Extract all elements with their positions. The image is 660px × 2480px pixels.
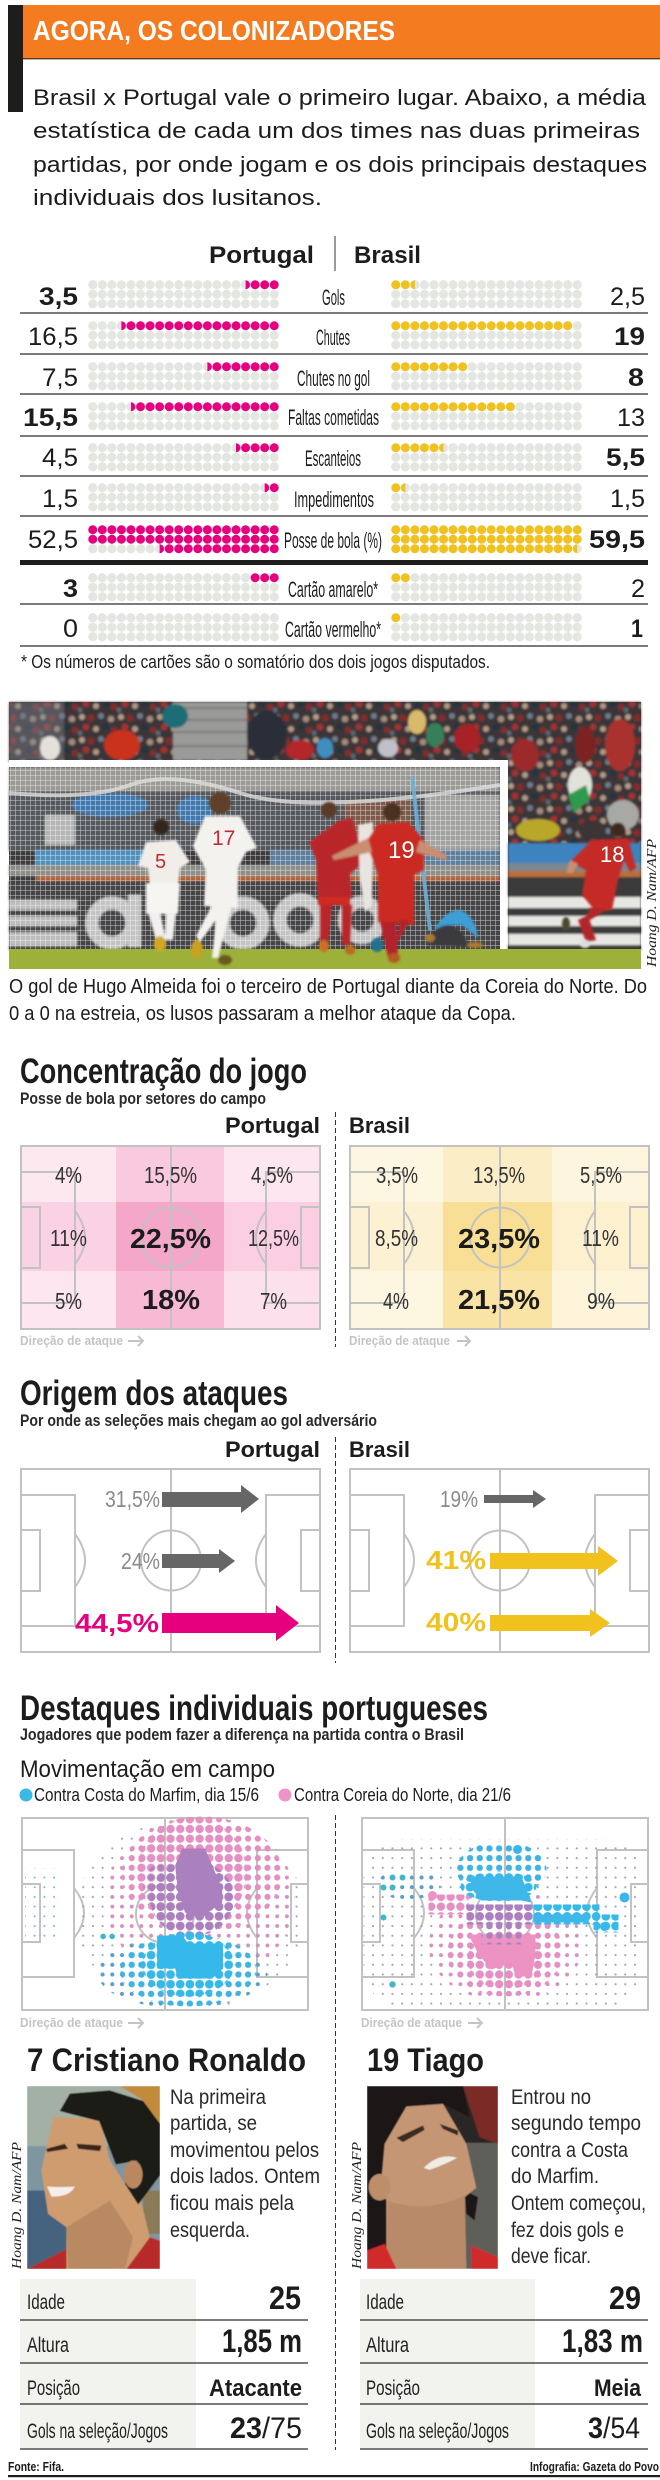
heat values: Brasil: 13,5% bbox=[473, 1162, 525, 1188]
movement map: Cristiano Ronaldo bbox=[21, 1816, 309, 2011]
heading: Origem dos ataques bbox=[20, 1374, 377, 1430]
player name: Tiago: 19 Tiago bbox=[367, 2042, 484, 2078]
arrow: 24% bbox=[121, 1548, 235, 1574]
bio text: Tiago: contra a Costa bbox=[511, 2139, 628, 2162]
footnote: * Os números de cartões são o somatório dos dois jogos disputados. bbox=[21, 652, 490, 672]
footer: source and credit: Fonte: Fifa. bbox=[8, 2459, 64, 2474]
team labels: Brasil bbox=[349, 1113, 410, 1138]
heading: Destaques individuais portugueses: Jogadores que podem fazer a diferença na partida contra o Brasil bbox=[20, 1725, 464, 1744]
heat values: Portugal: 4% bbox=[55, 1162, 82, 1188]
profile table: Tiago: Meia bbox=[594, 2375, 642, 2402]
movement map: Tiago bbox=[361, 1817, 649, 2011]
team labels: Brasil bbox=[349, 1437, 410, 1462]
row: Faltas cometidas: 13 bbox=[617, 404, 645, 432]
heat values: Brasil bbox=[375, 1162, 622, 1315]
profile table: Cristiano Ronaldo: 23 bbox=[230, 2412, 262, 2445]
row: Escanteios: 4,5 bbox=[42, 444, 78, 472]
profile table: Cristiano Ronaldo: Gols na seleção/Jogos bbox=[27, 2420, 168, 2443]
row: Chutes no gol: 7,5 bbox=[42, 364, 78, 392]
row: Impedimentos: 1,5 bbox=[610, 485, 645, 513]
arrow: 44,5% bbox=[75, 1605, 299, 1641]
bio text: Cristiano Ronaldo: esquerda. bbox=[170, 2219, 250, 2242]
heat values: Portugal: 5% bbox=[55, 1288, 82, 1314]
stats table heading: Portugal / Brasil: Brasil bbox=[354, 242, 421, 269]
profile table: Cristiano Ronaldo: /75 bbox=[262, 2412, 302, 2445]
row: Cartão vermelho bbox=[63, 613, 643, 643]
row: Impedimentos bbox=[42, 483, 645, 513]
photo: net and advertising boards bbox=[9, 767, 500, 950]
heat values: Portugal: 11% bbox=[50, 1225, 87, 1251]
row: Chutes no gol: 8 bbox=[628, 364, 644, 392]
subheading: Movimentação em campo: Movimentação em campo bbox=[20, 1756, 275, 1783]
heat pitch: Portugal bbox=[20, 1145, 321, 1330]
photo caption: 0 a 0 na estreia, os lusos passaram a melhor ataque da Copa. bbox=[9, 1003, 516, 1025]
row: Impedimentos: 1,5 bbox=[42, 485, 78, 513]
team labels: Portugal bbox=[225, 1113, 320, 1138]
heat values: Portugal bbox=[50, 1162, 299, 1315]
legend bbox=[20, 1785, 511, 1805]
stats table heading: Portugal / Brasil: Portugal bbox=[209, 242, 314, 269]
arrow: 24%: 24% bbox=[121, 1548, 160, 1574]
row: Cartão amarelo: 2 bbox=[631, 575, 645, 603]
bio text: Cristiano Ronaldo: partida, se bbox=[170, 2112, 257, 2135]
attack pitch: Brasil bbox=[350, 1469, 649, 1652]
row: Posse de bola: 52,5 bbox=[28, 526, 78, 554]
row: Gols bbox=[39, 280, 645, 311]
row: Chutes no gol: Chutes no gol bbox=[297, 366, 370, 391]
profile table: Tiago: Posição bbox=[366, 2377, 420, 2400]
row: Posse de bola: Posse de bola (%) bbox=[284, 528, 382, 553]
profile table: Cristiano Ronaldo: Posição bbox=[27, 2377, 80, 2400]
portrait: Cristiano Ronaldo bbox=[27, 2086, 160, 2269]
profile table: Tiago: Idade bbox=[366, 2291, 404, 2314]
bio text: Tiago: fez dois gols e bbox=[511, 2219, 624, 2242]
heat values: Portugal: 4,5% bbox=[251, 1162, 293, 1188]
heat values: Brasil: 3,5% bbox=[376, 1162, 418, 1188]
heat values: Brasil: 11% bbox=[582, 1225, 619, 1251]
photo: goal net mesh bbox=[9, 767, 500, 950]
profile table: Tiago: /54 bbox=[603, 2412, 640, 2445]
heading: Origem dos ataques: Origem dos ataques bbox=[20, 1374, 288, 1413]
team labels bbox=[225, 1437, 410, 1462]
photo: shirt numbers: 17 bbox=[212, 827, 235, 850]
arrow: 31,5%: 31,5% bbox=[105, 1486, 160, 1512]
row: Chutes: 19 bbox=[614, 323, 645, 351]
row: Chutes no gol bbox=[42, 362, 644, 392]
header: orange title band bbox=[8, 5, 660, 112]
player name: Cristiano Ronaldo: 7 Cristiano Ronaldo bbox=[27, 2042, 306, 2078]
photo: shirt numbers bbox=[155, 827, 624, 873]
heat values: Brasil: 8,5% bbox=[375, 1225, 418, 1251]
attack direction note: Direção de ataque bbox=[20, 2015, 123, 2030]
row: Gols: Gols bbox=[322, 285, 345, 310]
attack direction note: Direção de ataque bbox=[20, 1333, 123, 1348]
photo background: crowd bbox=[9, 702, 641, 844]
row: Faltas cometidas: 15,5 bbox=[23, 404, 78, 432]
bio text: Cristiano Ronaldo: movimentou pelos bbox=[170, 2139, 319, 2162]
row: Escanteios: 5,5 bbox=[606, 444, 645, 472]
attack direction note bbox=[20, 1333, 470, 1348]
intro text: partidas, por onde jogam e os dois principais destaques bbox=[33, 152, 647, 177]
heat values: Portugal: 15,5% bbox=[144, 1162, 197, 1188]
stats table heading: Portugal / Brasil bbox=[209, 236, 421, 271]
arrow: 40%: 40% bbox=[426, 1607, 486, 1637]
intro text: estatística de cada um dos times nas duas primeiras bbox=[33, 118, 640, 143]
profile table: Tiago bbox=[360, 2279, 648, 2449]
attack direction note bbox=[20, 2015, 482, 2030]
photo: shirt numbers: 18 bbox=[600, 842, 624, 867]
row: Posse de bola: 59,5 bbox=[589, 526, 645, 554]
bio text: Cristiano Ronaldo: Na primeira bbox=[170, 2086, 266, 2109]
heat values: Portugal: 18% bbox=[142, 1284, 200, 1315]
row: Escanteios bbox=[42, 443, 645, 472]
heading: Concentração do jogo: Concentração do jogo bbox=[20, 1052, 307, 1091]
photo: right advertising board bbox=[508, 843, 641, 950]
row: Faltas cometidas: Faltas cometidas bbox=[288, 405, 379, 430]
intro text: Brasil x Portugal vale o primeiro lugar. Abaixo, a média bbox=[33, 85, 647, 110]
row: Cartão amarelo: 3 bbox=[63, 575, 78, 603]
heat values: Portugal: 22,5% bbox=[130, 1223, 211, 1254]
portrait: Tiago bbox=[367, 2086, 498, 2269]
arrow: 44,5%: 44,5% bbox=[75, 1608, 159, 1638]
row: Cartão amarelo: Cartão amarelo* bbox=[288, 577, 378, 602]
attack direction note: Direção de ataque bbox=[349, 1333, 450, 1348]
profile table: Cristiano Ronaldo: 25 bbox=[269, 2280, 301, 2316]
heading: Origem dos ataques: Por onde as seleções mais chegam ao gol adversário bbox=[20, 1411, 377, 1430]
profile table: Cristiano Ronaldo: Altura bbox=[27, 2334, 69, 2357]
team labels bbox=[225, 1113, 410, 1138]
attack pitch: Portugal bbox=[21, 1469, 320, 1652]
bio text: Cristiano Ronaldo: ficou mais pela bbox=[170, 2192, 294, 2215]
row: Cartão vermelho: 0 bbox=[63, 615, 78, 643]
arrow: 40% bbox=[426, 1607, 610, 1637]
heat values: Portugal: 7% bbox=[260, 1288, 287, 1314]
photo: goal frame bbox=[9, 760, 508, 950]
profile table: Tiago: 3 bbox=[588, 2412, 603, 2445]
heat values: Brasil: 5,5% bbox=[580, 1162, 622, 1188]
photo: shirt numbers: 5 bbox=[155, 851, 166, 873]
photo credit: Hoang D. Nam/AFP bbox=[10, 2142, 25, 2270]
photo: shirt numbers: 19 bbox=[388, 837, 415, 864]
arrow: 41%: 41% bbox=[426, 1545, 486, 1575]
bio text: Tiago bbox=[511, 2086, 646, 2268]
header: orange title band: AGORA, OS COLONIZADORES bbox=[33, 15, 395, 46]
heat pitch: Brasil bbox=[349, 1145, 649, 1330]
heat values: Brasil: 9% bbox=[587, 1288, 615, 1314]
intro text: individuais dos lusitanos. bbox=[33, 185, 322, 210]
profile table: Cristiano Ronaldo: 1,85 m bbox=[222, 2323, 302, 2359]
arrow: 31,5% bbox=[105, 1485, 259, 1513]
profile table: Cristiano Ronaldo: Idade bbox=[27, 2291, 65, 2314]
row: Chutes: Chutes bbox=[316, 325, 350, 350]
photo: grass bbox=[9, 949, 641, 969]
profile table: Tiago: 29 bbox=[609, 2280, 641, 2316]
bio text: Tiago: Entrou no bbox=[511, 2086, 591, 2109]
arrow: 19% bbox=[440, 1486, 546, 1512]
heading: Concentração do jogo bbox=[20, 1052, 307, 1108]
row: Cartão amarelo bbox=[63, 573, 645, 603]
team labels: Portugal bbox=[225, 1437, 320, 1462]
row: Cartão vermelho: 1 bbox=[631, 615, 643, 643]
heat values: Brasil: 21,5% bbox=[458, 1284, 540, 1315]
row: Chutes bbox=[28, 321, 645, 351]
photo caption bbox=[9, 976, 647, 1025]
photo: Hugo Almeida goal bbox=[9, 702, 641, 969]
intro text bbox=[33, 85, 647, 210]
attack direction note: Direção de ataque bbox=[361, 2015, 462, 2030]
row: Cartão vermelho: Cartão vermelho* bbox=[285, 617, 381, 642]
heat values: Brasil: 23,5% bbox=[458, 1223, 540, 1254]
heading: Concentração do jogo: Posse de bola por setores do campo bbox=[20, 1089, 266, 1108]
stats table: comparative dot rows bbox=[20, 280, 648, 646]
legend: Contra Costa do Marfim, dia 15/6 bbox=[34, 1785, 259, 1805]
arrow: 41% bbox=[426, 1545, 618, 1576]
row: Chutes: 16,5 bbox=[28, 323, 78, 351]
row: Gols: 3,5 bbox=[39, 283, 78, 311]
profile table: Tiago: 1,83 m bbox=[562, 2323, 643, 2359]
row: Gols: 2,5 bbox=[610, 283, 645, 311]
photo credit: Hoang D. Nam/AFP bbox=[350, 2142, 365, 2270]
legend: Contra Coreia do Norte, dia 21/6 bbox=[294, 1785, 511, 1805]
heat values: Brasil: 4% bbox=[383, 1288, 409, 1314]
heading: Destaques individuais portugueses bbox=[20, 1689, 488, 1744]
profile table: Tiago: Gols na seleção/Jogos bbox=[366, 2420, 509, 2443]
profile table: Tiago: Altura bbox=[366, 2334, 409, 2357]
row: Posse de bola bbox=[28, 525, 645, 554]
heading: Destaques individuais portugueses: Destaques individuais portugueses bbox=[20, 1689, 488, 1728]
profile table: Cristiano Ronaldo: Atacante bbox=[209, 2375, 302, 2402]
row: Impedimentos: Impedimentos bbox=[294, 487, 374, 512]
footer: source and credit bbox=[8, 2459, 660, 2477]
row: Faltas cometidas bbox=[23, 402, 645, 432]
bio text: Cristiano Ronaldo bbox=[170, 2086, 320, 2242]
bio text: Cristiano Ronaldo: dois lados. Ontem bbox=[170, 2165, 320, 2188]
photo: players bbox=[138, 792, 636, 965]
profile table: Cristiano Ronaldo bbox=[20, 2279, 308, 2449]
row: Escanteios: Escanteios bbox=[305, 446, 361, 471]
photo credit: Hoang D. Nam/AFP bbox=[645, 839, 660, 968]
bio text: Tiago: do Marfim. bbox=[511, 2165, 599, 2188]
arrow: 19%: 19% bbox=[440, 1486, 478, 1512]
heat values: Portugal: 12,5% bbox=[248, 1225, 299, 1251]
bio text: Tiago: segundo tempo bbox=[511, 2112, 641, 2135]
bio text: Tiago: deve ficar. bbox=[511, 2245, 591, 2268]
